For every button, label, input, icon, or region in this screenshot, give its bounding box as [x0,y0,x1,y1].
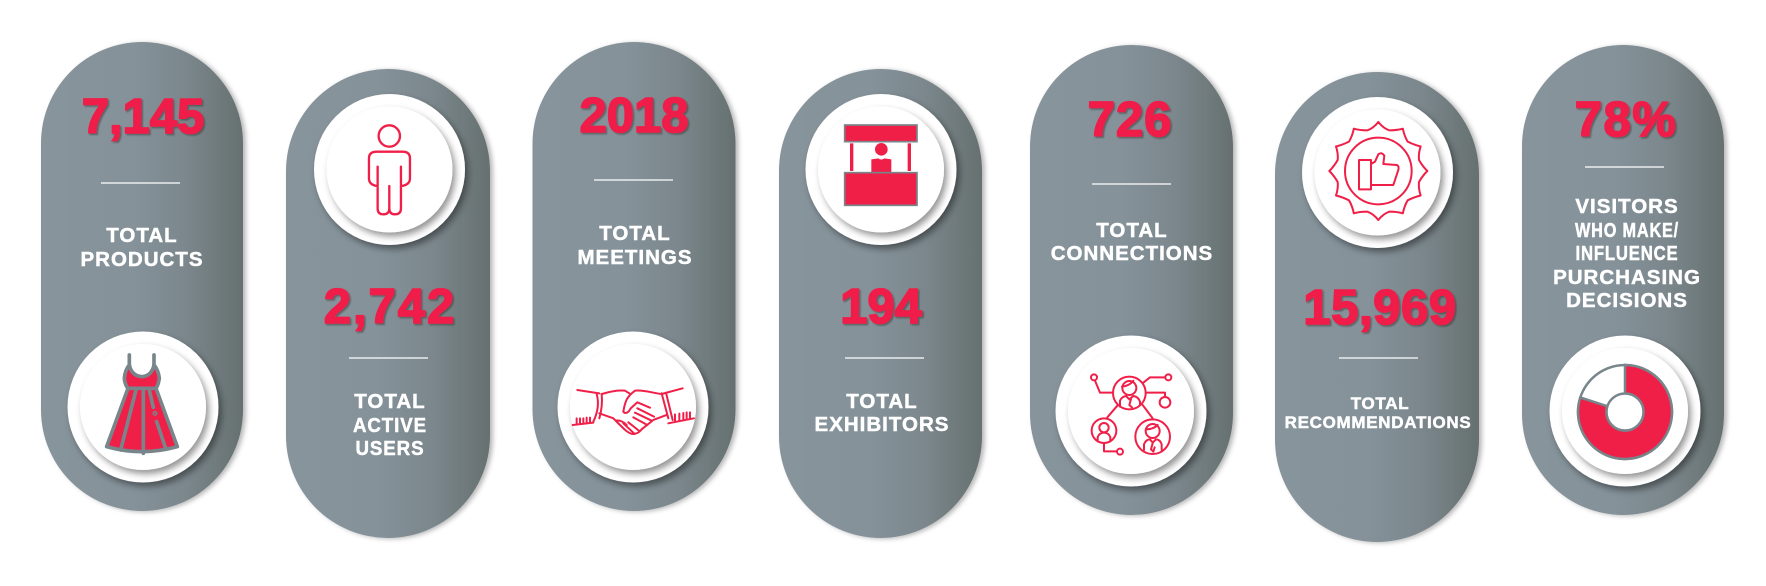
icon: handshake [558,332,708,482]
label: total products: TOTAL [106,224,178,247]
panel: visitors who make/influence purchasing decisions [1522,45,1724,515]
icon: thumbs-up badge [1302,97,1453,248]
panel: total exhibitors [779,69,982,538]
label: total exhibitors: EXHIBITORS [815,413,949,436]
icon: person [314,94,465,245]
label: total active users: USERS [356,437,424,460]
number: 2,742: 2,742 [324,280,456,334]
icon: donut chart [1550,336,1700,486]
panel: total products [41,42,243,511]
label: total active users: ACTIVE [353,414,427,437]
number: 7,145: 7,145 [82,90,204,144]
label: total connections: TOTAL [1096,219,1168,242]
label: total connections: CONNECTIONS [1051,242,1213,265]
label: total exhibitors: TOTAL [846,390,918,413]
label: total meetings: TOTAL [599,222,671,245]
label: visitors who make/influence purchasing decisions: PURCHASING [1553,266,1701,289]
label: total products: PRODUCTS [80,248,204,271]
number: 78%: 78% [1575,93,1677,147]
number: 726: 726 [1088,93,1172,147]
panel: total recommendations [1275,72,1479,542]
icon: exhibitor booth [806,94,956,245]
panel: total connections [1030,45,1233,515]
number: 194: 194 [840,280,922,334]
label: visitors who make/influence purchasing decisions: VISITORS [1575,195,1679,218]
label: visitors who make/influence purchasing decisions: INFLUENCE [1576,242,1678,265]
label: visitors who make/influence purchasing decisions: DECISIONS [1566,289,1688,312]
label: visitors who make/influence purchasing decisions: WHO MAKE/ [1575,219,1679,242]
label: total recommendations: TOTAL [1351,394,1409,413]
icon: people network [1056,336,1206,486]
label: total active users: TOTAL [354,390,426,413]
icon: dress [68,332,218,482]
panel: total meetings [532,42,736,511]
panel: total active users [286,69,490,538]
label: total recommendations: RECOMMENDATIONS [1285,413,1471,432]
label: total meetings: MEETINGS [577,246,693,269]
number: 15,969: 15,969 [1303,281,1457,335]
label: total active users [353,390,427,460]
label: visitors who make/influence purchasing decisions [1553,195,1701,312]
number: 2018: 2018 [579,89,689,143]
